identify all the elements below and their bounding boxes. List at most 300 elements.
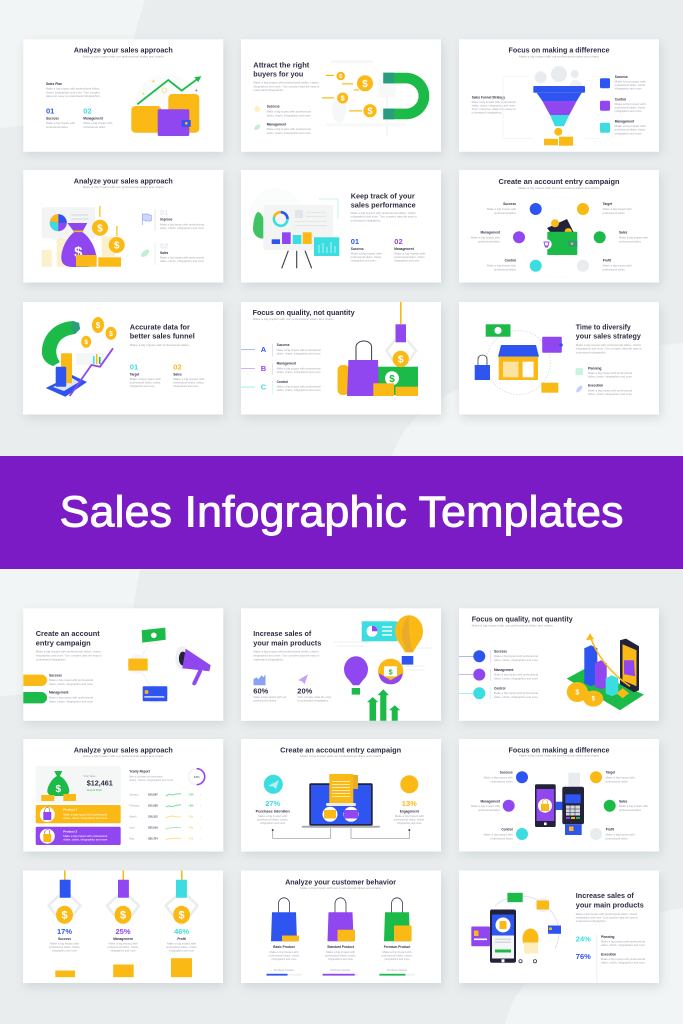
stat: 76% execution: 76% [576, 952, 591, 961]
table: monthly report: +8% [188, 804, 194, 808]
node: sales: Make a big impact with [619, 805, 649, 808]
column: 46% profit: infographics and more [169, 950, 195, 952]
node: target: Target [603, 202, 613, 206]
text block: yearly report: Yearly Report [129, 770, 151, 774]
list item B: management [241, 362, 321, 375]
product 2 band [36, 827, 121, 845]
stat: purchase intention: professional slides, charts, [257, 818, 289, 822]
table: monthly report: -2% [188, 814, 194, 818]
list item C: control: Make a big impact with professional [277, 386, 321, 388]
heading: Attract the right [253, 60, 310, 69]
table: monthly report: ↑ [200, 804, 201, 808]
heading: sales performance [351, 200, 416, 209]
stat: 76% execution: Execution [601, 952, 616, 956]
heading: Focus on quality, not quantity [253, 308, 355, 317]
stat: 24% planning: slides, charts, infographics and more [601, 944, 646, 947]
stat: 02 management: 02 [394, 237, 403, 246]
heading [253, 60, 310, 79]
list item: control: professional slides, charts, [615, 106, 646, 109]
heading: entry campaign [36, 638, 91, 647]
subheading: Make a big impact with professional slides [130, 344, 190, 347]
panel: create an account entry campaign, laptop [241, 739, 441, 852]
text block: intro: infographics and more. Turn complex data the easy to [253, 654, 320, 657]
table: monthly report [129, 792, 201, 840]
list item: management [459, 668, 539, 681]
heading: Focus on making a difference [508, 46, 610, 55]
stat: 01 success: Success [351, 247, 364, 251]
list item: control: Make a big impact with professional [494, 692, 538, 695]
heading: Keep track of your [351, 191, 415, 200]
panel: increase sales of your main products, phone [459, 870, 659, 983]
sales total panel: $ [56, 784, 62, 795]
subheading: Make a big impact with our professional slides and charts [83, 55, 165, 58]
list item: control [459, 686, 539, 699]
illustration: money bag and pie chart [42, 206, 125, 267]
list item A: success [241, 343, 321, 357]
node: control [484, 828, 528, 840]
list item: success [600, 75, 646, 91]
text block: intro: Make a big impact with professional slides, charts, [576, 913, 638, 916]
stat: engagement: 13% [402, 799, 417, 808]
text block: sales funnel strategy: Sales Funnel Strategy [472, 95, 505, 99]
panel: attract the right buyers, magnet [241, 39, 441, 152]
node: success [484, 771, 528, 784]
list item: success: professional slides, charts, [615, 84, 646, 87]
panel: focus on making a difference, funnel [459, 39, 659, 152]
sales total panel [36, 766, 121, 803]
node: target: Make a big impact with [603, 208, 632, 211]
list item: sales [155, 241, 205, 265]
icon: management [253, 124, 261, 131]
stat: engagement: Engagement [400, 809, 420, 813]
stat: 01 target: professional slides, charts, [130, 382, 161, 384]
panel: time to diversify your sales strategy, shop [459, 302, 659, 414]
node: success: professional slides [494, 212, 517, 215]
stat: 01 success: professional slides [46, 126, 69, 129]
subheading: Make a big impact with our professional slides and charts [300, 887, 382, 890]
chart: progress donut: 64% [194, 775, 200, 779]
list item: control: Make a big impact with [615, 103, 646, 106]
stat: 02 sales: infographics and more [173, 385, 199, 388]
subheading: Make a big impact with our professional slides and charts [519, 55, 600, 58]
panel: analyze your customer behavior, shopping bags [241, 870, 441, 983]
illustration: isometric phone, magnet, bars and coins [42, 317, 116, 397]
node: profit: Profit [603, 259, 612, 263]
stat: 24% planning: Make a big impact with professional [601, 940, 645, 944]
text block: yearly report [129, 770, 174, 782]
table: monthly report: $16,312 [148, 814, 158, 818]
list item: management: infographics and more [615, 132, 642, 135]
table: monthly report: -1% [188, 836, 194, 840]
heading: your main products [576, 900, 644, 910]
illustration: laptop with receipt [302, 774, 380, 828]
node: management: professional slides [478, 809, 501, 812]
node: control: professional slides [494, 269, 517, 272]
stat: engagement: Make a big impact with [395, 815, 424, 818]
heading [351, 191, 416, 209]
heading: your main products [253, 638, 321, 647]
product 1 band: Make a big impact with professional [63, 814, 108, 816]
text block: intro: Make a big impact with professional slides, charts, [253, 651, 320, 654]
node: management: Make a big impact with [471, 805, 501, 808]
subheading: Make a big impact with our professional slides and charts [472, 624, 554, 627]
illustration: wallet, coins and rising arrow: + [195, 88, 199, 94]
list item: management: Management [267, 122, 287, 126]
column: 17% success: $ [61, 910, 68, 922]
list item: success: Success [494, 650, 507, 654]
table: monthly report: February [129, 804, 140, 808]
stat: 02 management: professional slides, charts, [394, 256, 426, 259]
stat: purchase intention: 27% [265, 799, 281, 808]
illustration: wallet, coins and rising arrow: ✦ [141, 91, 145, 97]
stat: 76% execution [576, 952, 646, 964]
subheading: Make a big impact with our professional slides and charts [519, 755, 600, 758]
illustration: megaphone, money and card [128, 626, 211, 703]
text block: yearly report: Make a big impact with professional [129, 776, 163, 778]
sales total panel: Current Profit [87, 789, 102, 792]
text block: intro: Make a big impact with professional slides, charts, [351, 212, 417, 215]
stat: purchase intention: Make a big impact with [258, 815, 288, 818]
main title: Sales Infographic Templates [60, 488, 624, 537]
node: target: Make a big impact with [606, 776, 635, 780]
table: monthly report: $15,238 [148, 804, 158, 808]
list item: success: slides, charts, infographics and more [267, 114, 311, 117]
list item: planning [576, 366, 633, 378]
text block: intro: Make a big impact with professional slides, charts, [576, 344, 642, 347]
stat: purchase intention [256, 775, 290, 825]
stat: 01 target: infographics and more [130, 385, 155, 388]
illustration: claw, coin, shopping bag and money: $ [398, 354, 404, 366]
node: profit [590, 828, 635, 840]
panel: increase sales of your main products, balloons [241, 608, 441, 721]
list item: management: Management [49, 691, 69, 695]
product: basic: Purchase Intention [274, 969, 295, 972]
product: premium: infographics and more [384, 958, 410, 961]
text block: sales funnel strategy [472, 95, 516, 115]
list item: success [267, 105, 311, 117]
icon: success [254, 106, 260, 112]
subheading: Make a big impact with our professional slides and charts [300, 755, 382, 758]
node: profit: Profit [606, 828, 615, 832]
illustration: isometric phone, magnet, bars and coins: $ [96, 321, 101, 330]
stat: 02 sales [173, 362, 205, 388]
text block: intro: Make a big impact with professional slides, charts, [36, 651, 102, 654]
illustration: magnet attracting coins: $ [341, 94, 346, 103]
table: monthly report: January [129, 792, 139, 796]
list item: improve: 01 [160, 208, 168, 217]
sales total panel: $12,461 [87, 779, 113, 788]
text block: sales plan: charts, infographics and more. Turn complex [46, 91, 101, 94]
illustration: magnet attracting coins [322, 60, 429, 135]
product: standard: infographics and more [328, 958, 354, 961]
node: management: Management [481, 230, 501, 234]
list item: planning: Make a big impact with professional [588, 372, 632, 375]
table: monthly report: March [129, 814, 137, 818]
illustration: claw, coin, shopping bag and money: $ [389, 374, 395, 385]
list item B: management: B [261, 364, 267, 373]
list item: success [23, 673, 94, 686]
subheading: Make a big impact with our professional slides and charts [83, 186, 165, 189]
list item: control: infographics and more [615, 110, 642, 113]
column: 46% profit: 46% [174, 927, 189, 936]
list item: management: slides, charts, infographics and more [49, 700, 94, 703]
list item: management: Make a big impact with professional [49, 696, 93, 699]
illustration: hot air balloons and growth arrows [334, 615, 431, 721]
text block: intro: infographics and more. Turn complex data the easy to [576, 916, 638, 920]
illustration: isometric phone, magnet, bars and coins: $ [84, 339, 88, 346]
node: management: Make a big impact with [471, 236, 501, 239]
list item: improve: Make a big impact with professional [160, 224, 204, 226]
text block: sales funnel strategy: Make a big impact with professional [472, 101, 516, 104]
text block: intro: understand infographics [36, 658, 67, 661]
product 1 band: slides, charts, infographics and more [63, 817, 108, 820]
illustration: claw, coin, shopping bag and money [338, 302, 418, 396]
column: 17% success: professional slides, charts, [49, 946, 80, 949]
illustration: isometric phone, magnet, bars and coins: $ [109, 331, 113, 338]
list item C: control: C [261, 383, 267, 392]
product 2 band: Make a big impact with professional [63, 835, 108, 838]
node: target [577, 202, 632, 215]
icon: leaf [140, 248, 150, 258]
column: 46% profit: $ [179, 910, 185, 922]
text block: intro: understand infographics [253, 658, 284, 661]
list item: sales: Make a big impact with professional [160, 256, 204, 260]
node: success: Make a big impact with [484, 776, 513, 780]
table: monthly report: -3% [188, 826, 194, 830]
heading: Analyze your sales approach [74, 176, 173, 185]
list item: success: Make a big impact with professional [49, 679, 93, 682]
node: management: Management [481, 799, 501, 803]
column: 17% success [48, 870, 80, 977]
list item: management: Management [615, 120, 635, 124]
list item: management: slides, charts, infographics and more [494, 677, 539, 680]
node: control: Control [501, 828, 513, 832]
heading: Analyze your sales approach [74, 745, 173, 754]
heading: your sales strategy [576, 332, 642, 341]
heading [576, 891, 644, 910]
stat: 01 success [351, 237, 382, 263]
text block: yearly report: slides, charts, infographics and more [129, 779, 174, 782]
chart: progress donut [189, 769, 205, 785]
list item: improve: Improve [160, 218, 173, 222]
product: basic: infographics and more [272, 958, 297, 961]
stat: 01 success: Make a big impact with [351, 252, 382, 256]
list item: execution [575, 384, 633, 396]
list item: success: Success [49, 673, 62, 677]
heading [36, 629, 100, 647]
illustration: shop with orbiting money, wallet, bag [475, 324, 563, 394]
list item: management: Make a big impact with [615, 125, 646, 128]
list item: improve: slides, charts, infographics and more [160, 227, 205, 230]
heading: Increase sales of [576, 891, 634, 900]
text block: intro [576, 913, 638, 923]
node: sales: professional slides [619, 809, 642, 812]
panel: create an account entry campaign, wallet [459, 170, 659, 282]
product: standard [323, 898, 358, 976]
banner: purple title band [0, 456, 683, 569]
column: 25% management: $ [120, 910, 126, 922]
node: control: Make a big impact with [484, 834, 513, 836]
product: premium: Premium Product [384, 945, 411, 949]
illustration: presentation board with charts [249, 188, 339, 268]
illustration: money bag and pie chart: $ [114, 241, 120, 252]
node: target [590, 771, 635, 784]
heading: Focus on quality, not quantity [472, 614, 574, 623]
node: control: professional slides [491, 838, 513, 840]
stat: 20%: 20% [297, 687, 313, 696]
panel: analyze your sales approach, wallet and coins [23, 39, 223, 152]
stat: 60% [253, 674, 286, 703]
product: basic: Basic Product [273, 945, 296, 949]
node: success [487, 202, 542, 215]
text block: intro [576, 344, 642, 354]
text block: intro: infographics and more. Turn complex data the easy to [351, 216, 417, 219]
text block: intro: understand infographics [351, 220, 382, 222]
stat: 02 management [394, 237, 426, 263]
list item: success: slides, charts, infographics and more [494, 659, 539, 662]
heading: Accurate data for [130, 322, 190, 331]
illustration: isometric bars, phone and coins: $ [592, 696, 596, 702]
stat: 24% planning: Planning [601, 935, 615, 939]
column: 25% management: 25% [115, 927, 131, 936]
stat: purchase intention: infographics and more [260, 822, 286, 825]
product: basic: Make a big impact with [270, 951, 299, 954]
column: 25% management: professional slides, charts, [108, 946, 139, 949]
panel: focus on making a difference, card terminal [459, 739, 659, 852]
list item: execution: slides, charts, infographics and more [588, 393, 633, 396]
text block: sales funnel strategy: slides, charts, infographics and more. [472, 104, 516, 107]
list item: sales: 02 [160, 241, 168, 250]
text block: sales plan [46, 82, 101, 98]
text block: intro: understand infographics [576, 920, 607, 923]
illustration: phone and payment terminal [535, 773, 584, 835]
table: monthly report: April [129, 826, 135, 830]
stat: engagement [394, 775, 425, 825]
sales total panel: Total Sales [83, 775, 96, 778]
node: profit [577, 259, 632, 272]
list item C: control [241, 380, 321, 393]
list item: success: Make a big impact with [615, 80, 646, 84]
list item: execution: Make a big impact with professional [588, 389, 632, 392]
heading: Create an account entry campaign [498, 177, 620, 186]
node: sales: Make a big impact with [619, 236, 649, 239]
table: monthly report: ↑ [200, 794, 201, 796]
column: 46% profit: Make a big impact with [167, 942, 197, 946]
subheading: Make a big impact with our professional slides and charts [518, 187, 600, 190]
stat: 01 target [130, 362, 162, 388]
list item: success: slides, charts, infographics and more [49, 683, 94, 686]
text block: intro [36, 651, 102, 661]
product: standard: Purchase Intention [331, 969, 351, 972]
list item: control: Control [615, 97, 626, 101]
heading [253, 629, 321, 647]
heading [576, 322, 642, 341]
node: management: professional slides [478, 240, 501, 243]
illustration: green wallet with cards and coins [542, 219, 577, 255]
heading: Create an account entry campaign [280, 746, 402, 754]
heading: buyers for you [253, 70, 304, 79]
list item A: success: slides, charts, infographics and more [277, 352, 321, 356]
node: sales: Sales [619, 230, 628, 234]
column: 17% success: infographics and more [52, 950, 78, 952]
heading: Analyze your customer behavior [285, 878, 396, 886]
node: control: Control [505, 259, 516, 263]
node: sales [594, 230, 649, 243]
panel: accurate data for better sales funnel [23, 302, 223, 414]
list item: management [23, 691, 94, 703]
subheading: Make a big impact with our professional slides and charts [253, 318, 335, 321]
node: target: Target [606, 771, 616, 775]
text block: sales funnel strategy: Turn complex data into easy to [472, 108, 516, 111]
illustration: isometric bars, phone and coins: $ [575, 689, 579, 696]
product: premium: professional slides, charts, [382, 954, 413, 958]
table: monthly report: May [129, 836, 135, 840]
stat: 02 management: Make a big impact with [394, 252, 426, 256]
table: monthly report: $10,567 [148, 792, 158, 796]
list item B: management: slides, charts, infographics and more [277, 371, 321, 374]
stat: 20% [297, 674, 332, 703]
subheading: Make a big impact with our professional slides and charts [83, 755, 165, 758]
illustration: magnet attracting coins: $ [367, 106, 373, 116]
list item: management: Make a big impact with professional [494, 673, 538, 676]
heading: Analyze your sales approach [74, 46, 173, 55]
product 1 band [36, 805, 121, 823]
column: 46% profit [166, 870, 198, 977]
node: success: Success [503, 202, 516, 206]
table: monthly report: +5% [188, 792, 194, 796]
node: management [471, 230, 525, 243]
list item: sales: slides, charts, infographics and more [160, 260, 205, 263]
node ring [519, 197, 599, 277]
text block: intro [253, 82, 320, 92]
list item: success: Success [267, 105, 280, 109]
illustration: wallet, coins and rising arrow [131, 74, 201, 136]
stat: 24% planning [576, 934, 646, 947]
list item: success: infographics and more [615, 88, 642, 91]
node: profit: Make a big impact with [603, 265, 632, 268]
list item: success: Make a big impact with professional [494, 655, 538, 658]
stat: 24% planning: 24% [576, 934, 591, 944]
heading: Time to diversify [576, 322, 632, 331]
list item: management: Make a big impact with professional [267, 128, 311, 131]
column: 17% success: 17% [57, 927, 72, 936]
node: sales [604, 799, 649, 812]
text block: intro: infographics and more. Turn complex data the easy to [576, 348, 642, 351]
list item C: control: slides, charts, infographics and more [277, 389, 321, 392]
illustration: isometric bars, phone and coins [567, 633, 644, 710]
node: profit: Make a big impact with [606, 834, 635, 836]
stat: 20%: to understand infographics [297, 700, 329, 703]
node: success: Make a big impact with [487, 208, 517, 211]
list item A: success: Success [277, 343, 290, 347]
illustration: sales funnel [503, 66, 601, 146]
panel: focus on quality, shopping bag [241, 302, 441, 414]
stat: 01 success [46, 106, 76, 129]
node: profit: professional slides [606, 838, 628, 840]
node: sales: professional slides [619, 240, 642, 243]
list item: execution: Execution [588, 384, 603, 388]
text block: intro: infographics and more. Turn complex data the easy to [253, 85, 320, 88]
text block: intro: Make a big impact with professional slides, charts, [253, 82, 320, 85]
node: target: professional slides [606, 780, 628, 784]
column: 25% management [107, 870, 139, 977]
text block: intro: understand infographics [576, 352, 607, 354]
text block: intro [253, 651, 320, 661]
illustration: hot air balloons and growth arrows: $ [389, 669, 393, 676]
text block: sales funnel strategy: understand infographics [472, 112, 503, 115]
column: 25% management: Make a big impact with [108, 942, 138, 946]
product 2 band: Product 2 [63, 829, 77, 833]
